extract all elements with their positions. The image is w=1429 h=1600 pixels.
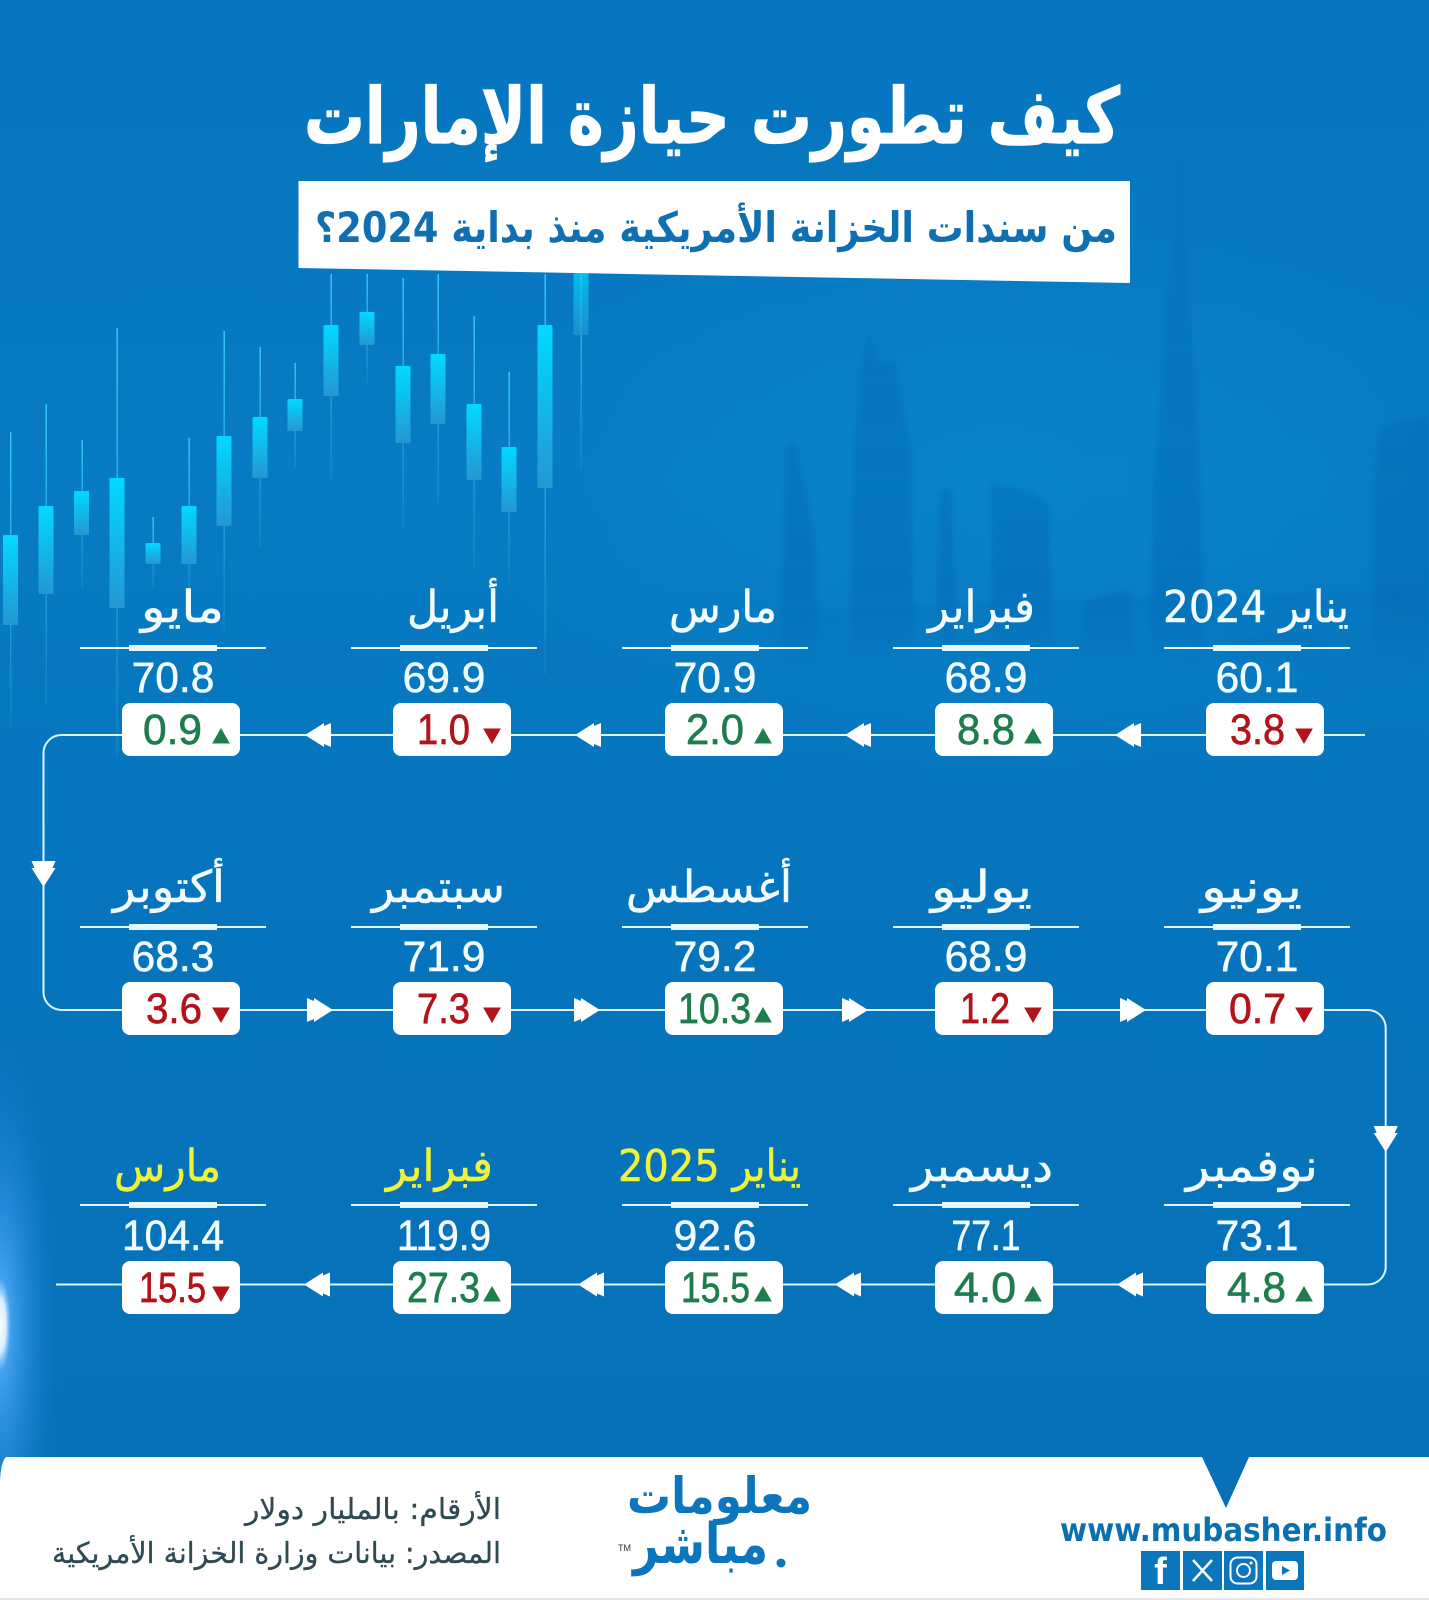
month: January 2025: يناير 2025 (618, 1141, 801, 1192)
month: June: 0.7 (1229, 985, 1286, 1033)
month: March 2025: مارس (114, 1141, 221, 1192)
logo: Mubasher Info (618, 1467, 812, 1577)
month: February 2025 (351, 1141, 537, 1314)
month: October (80, 858, 266, 1035)
month: March 2025 (80, 1141, 266, 1314)
month: July (893, 862, 1079, 1035)
icon: youtube (1266, 1551, 1304, 1590)
month: December (893, 1141, 1079, 1314)
month: September: سبتمبر (370, 862, 505, 913)
month: July: 1.2 (960, 985, 1010, 1033)
month: December: ديسمبر (909, 1141, 1053, 1192)
month: May (80, 582, 266, 756)
month: January 2024: يناير 2024 (1163, 582, 1349, 633)
month: February: 8.8 (957, 706, 1015, 754)
month: January 2025: 15.5 (681, 1264, 750, 1312)
month: April: 69.9 (403, 655, 485, 702)
footer panel (0, 1457, 1429, 1600)
month: May: 70.8 (132, 655, 214, 702)
month: January 2024: 3.8 (1230, 706, 1285, 754)
month: June: 70.1 (1216, 934, 1298, 981)
month: February: 68.9 (945, 655, 1027, 702)
month: March 2025: 15.5 (139, 1264, 206, 1312)
month: March 2025: 104.4 (122, 1213, 224, 1260)
month: August: 79.2 (674, 934, 756, 981)
month: March: مارس (669, 582, 777, 633)
connector flow line (44, 735, 1386, 1284)
subtitle text: من سندات الخزانة الأمريكية منذ بداية 2024؟ (315, 202, 1117, 253)
month: April (351, 578, 537, 756)
month: August (622, 858, 808, 1035)
month: December: 4.0 (954, 1264, 1016, 1312)
month: October: 3.6 (146, 985, 202, 1033)
icon: facebook (1141, 1551, 1180, 1593)
website url: www.mubasher.info (1060, 1511, 1387, 1549)
month: November: نوفمبر (1184, 1141, 1318, 1192)
month: March (622, 582, 808, 756)
month: July: يوليو (929, 862, 1032, 913)
month: December: 77.1 (952, 1213, 1020, 1260)
subtitle banner (298, 181, 1130, 283)
month: November (1164, 1141, 1350, 1314)
month: October: أكتوبر (111, 858, 225, 913)
social icons (1141, 1551, 1304, 1593)
month: August: أغسطس (626, 858, 792, 913)
month: September: 71.9 (403, 934, 485, 981)
icon: instagram (1224, 1551, 1263, 1590)
flow arrows (32, 723, 1398, 1296)
month: March: 2.0 (686, 706, 744, 754)
month: August: 10.3 (678, 985, 751, 1033)
month: January 2024: 60.1 (1216, 655, 1298, 702)
month: February 2025: فبراير (384, 1141, 493, 1192)
month: November: 4.8 (1227, 1264, 1286, 1312)
month: July: 68.9 (945, 934, 1027, 981)
month: January 2024 (1163, 582, 1350, 756)
month: September (351, 862, 537, 1035)
skyline silhouette (760, 150, 1429, 680)
month: February 2025: 119.9 (397, 1213, 491, 1260)
units note: الأرقام: بالمليار دولار (243, 1490, 501, 1526)
logo: Mubasher Info: معلومات (627, 1467, 812, 1526)
month: May: مايو (139, 582, 224, 633)
month: April: 1.0 (417, 706, 470, 754)
month: June (1164, 862, 1350, 1035)
month: June: يونيو (1199, 862, 1302, 913)
month: April: أبريل (407, 578, 499, 633)
logo: Mubasher Info: TM (618, 1543, 631, 1553)
candlestick chart (3, 272, 588, 755)
month: January 2025 (618, 1141, 808, 1314)
title: كيف تطورت حيازة الإمارات (304, 73, 1120, 162)
source note: المصدر: بيانات وزارة الخزانة الأمريكية (52, 1534, 501, 1570)
month: March: 70.9 (674, 655, 756, 702)
month: February (893, 582, 1079, 756)
month: February 2025: 27.3 (407, 1264, 480, 1312)
month: September: 7.3 (417, 985, 470, 1033)
icon: X (1183, 1551, 1222, 1590)
month: February: فبراير (926, 582, 1035, 633)
month: May: 0.9 (143, 706, 202, 754)
month: October: 68.3 (132, 934, 214, 981)
icon: facebook: f (1154, 1551, 1167, 1593)
month: January 2025: 92.6 (674, 1213, 756, 1260)
month: November: 73.1 (1216, 1213, 1298, 1260)
logo: Mubasher Info: مباشر (631, 1512, 768, 1577)
